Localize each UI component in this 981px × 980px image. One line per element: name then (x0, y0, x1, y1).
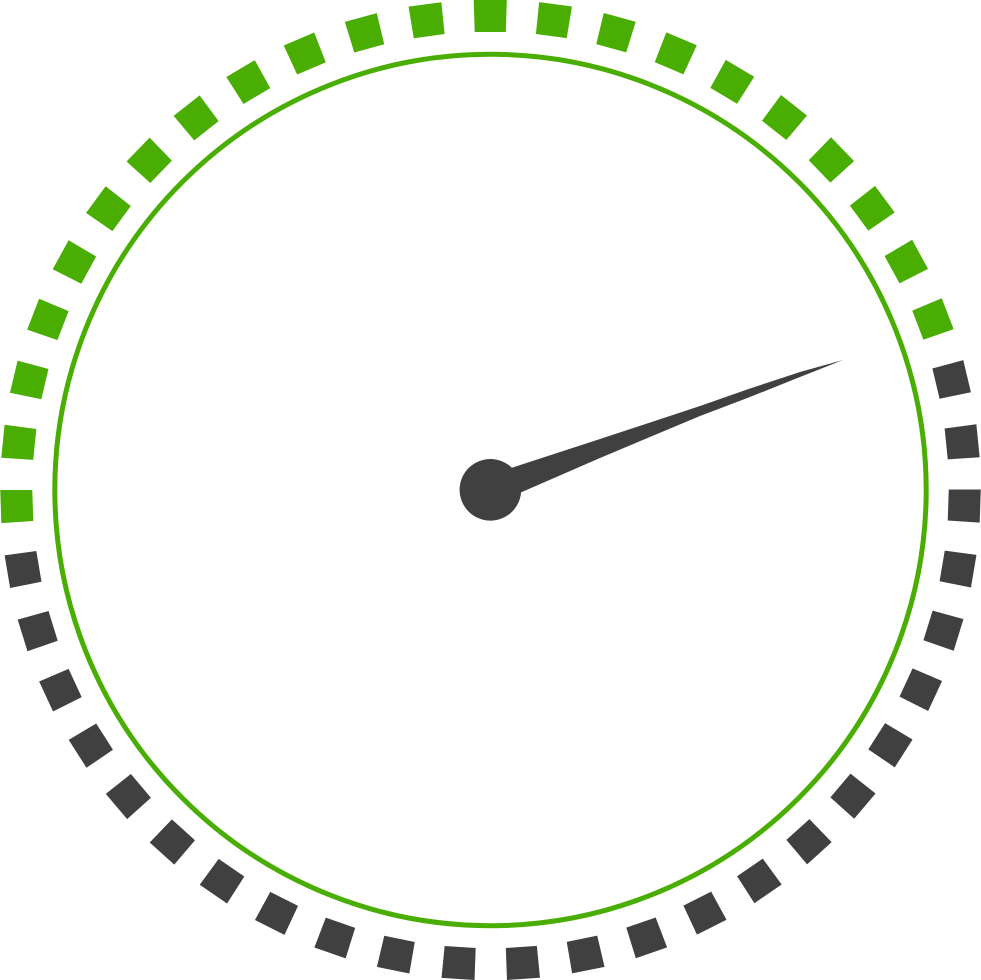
dark tick marks (5, 360, 981, 980)
needle hub (460, 459, 521, 521)
green ring (55, 54, 926, 926)
needle (460, 360, 843, 521)
green tick marks (0, 0, 954, 523)
needle pointer (505, 360, 843, 495)
